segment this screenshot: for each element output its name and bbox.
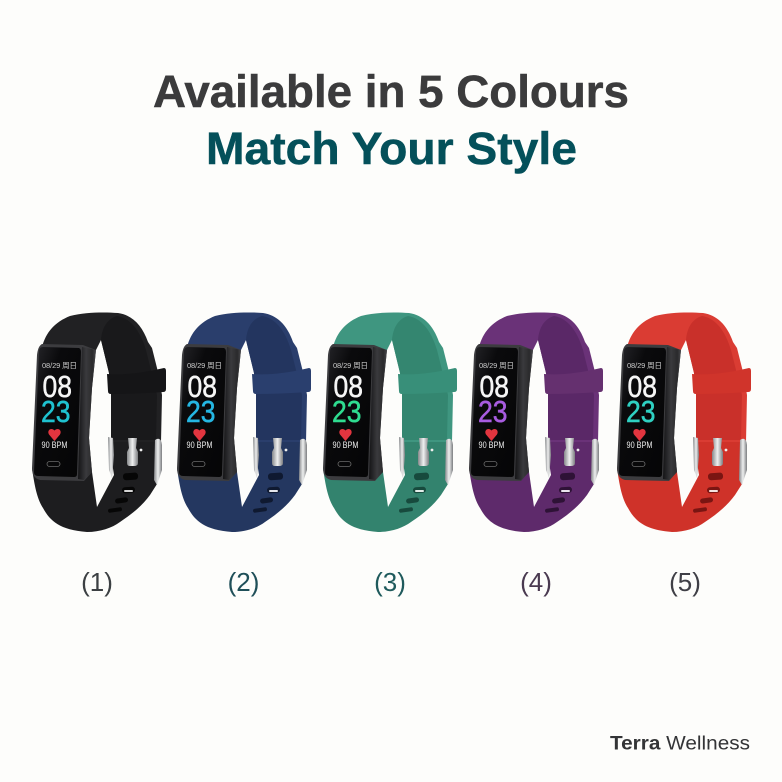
heart	[633, 429, 646, 441]
upper band	[627, 312, 747, 442]
home button	[47, 462, 60, 466]
inner strap	[246, 316, 302, 440]
date: 08/29 周日	[42, 361, 77, 370]
buckle	[545, 437, 599, 485]
watch body	[469, 344, 533, 481]
keeper loop	[692, 368, 751, 394]
side strip	[515, 347, 533, 480]
minute: 23	[478, 394, 508, 429]
minute: 23	[626, 394, 656, 429]
hour: 08	[480, 369, 509, 404]
label 5: (5)	[669, 567, 701, 597]
hour: 08	[628, 369, 657, 404]
label 2: (2)	[228, 567, 259, 597]
date: 08/29 周日	[479, 361, 514, 370]
inner strap	[538, 316, 594, 440]
date: 08/29 周日	[627, 361, 662, 370]
keeper loop	[544, 368, 603, 394]
side strip	[369, 347, 387, 480]
label 1: (1)	[81, 567, 113, 597]
strap holes	[693, 472, 723, 513]
heart	[485, 429, 498, 441]
screen	[619, 347, 666, 477]
lower band	[617, 440, 746, 532]
heart	[48, 429, 61, 441]
buckle	[253, 437, 307, 485]
date: 08/29 周日	[187, 361, 222, 370]
screen	[325, 347, 372, 477]
buckle	[399, 437, 453, 485]
title	[153, 66, 629, 174]
watch body	[323, 344, 387, 481]
upper band	[479, 312, 599, 442]
minute: 23	[332, 394, 362, 429]
home button	[484, 462, 497, 466]
keeper loop	[398, 368, 457, 394]
lower band	[323, 440, 452, 532]
screen	[179, 347, 226, 477]
heart	[339, 429, 352, 441]
label 4: (4)	[520, 567, 552, 597]
watch 3: green	[323, 312, 457, 532]
lower band	[177, 440, 306, 532]
watch body	[617, 344, 681, 481]
bpm: 90 BPM	[626, 440, 653, 451]
watch 2: navy	[177, 312, 311, 532]
minute: 23	[41, 394, 70, 429]
upper band	[42, 312, 162, 442]
buckle	[693, 437, 747, 485]
strap holes	[545, 472, 575, 513]
watch body	[32, 344, 96, 481]
bpm: 90 BPM	[478, 440, 505, 451]
home button	[632, 462, 645, 466]
screen	[471, 347, 518, 477]
bpm: 90 BPM	[186, 440, 213, 451]
side strip	[663, 347, 681, 480]
side strip	[223, 347, 241, 480]
keeper loop	[107, 368, 166, 394]
home button	[338, 462, 351, 466]
bpm: 90 BPM	[42, 440, 68, 451]
hour: 08	[42, 369, 72, 404]
upper band	[187, 312, 307, 442]
strap holes	[253, 472, 283, 513]
keeper loop	[252, 368, 311, 394]
colour number labels	[81, 567, 701, 597]
watch 1: black	[32, 312, 166, 532]
watch 5: red	[617, 312, 751, 532]
home button	[192, 462, 205, 466]
lower band	[32, 440, 161, 532]
upper band	[333, 312, 453, 442]
lower band	[469, 440, 598, 532]
inner strap	[686, 316, 742, 440]
date: 08/29 周日	[333, 361, 368, 370]
label 3: (3)	[374, 567, 406, 597]
strap holes	[399, 472, 429, 513]
screen	[34, 347, 81, 477]
inner strap	[392, 316, 448, 440]
hour: 08	[188, 369, 217, 404]
title line 1: Available in 5 Colours	[153, 66, 629, 117]
buckle	[108, 437, 162, 485]
title line 2: Match Your Style	[206, 123, 577, 174]
side strip	[78, 347, 96, 480]
bpm: 90 BPM	[332, 440, 359, 451]
watch body	[177, 344, 241, 481]
heart	[193, 429, 206, 441]
hour: 08	[334, 369, 363, 404]
minute: 23	[186, 394, 216, 429]
brand footer: Terra Wellness	[610, 734, 750, 754]
watch 4: purple	[469, 312, 603, 532]
inner strap	[101, 316, 157, 440]
strap holes	[108, 472, 138, 513]
